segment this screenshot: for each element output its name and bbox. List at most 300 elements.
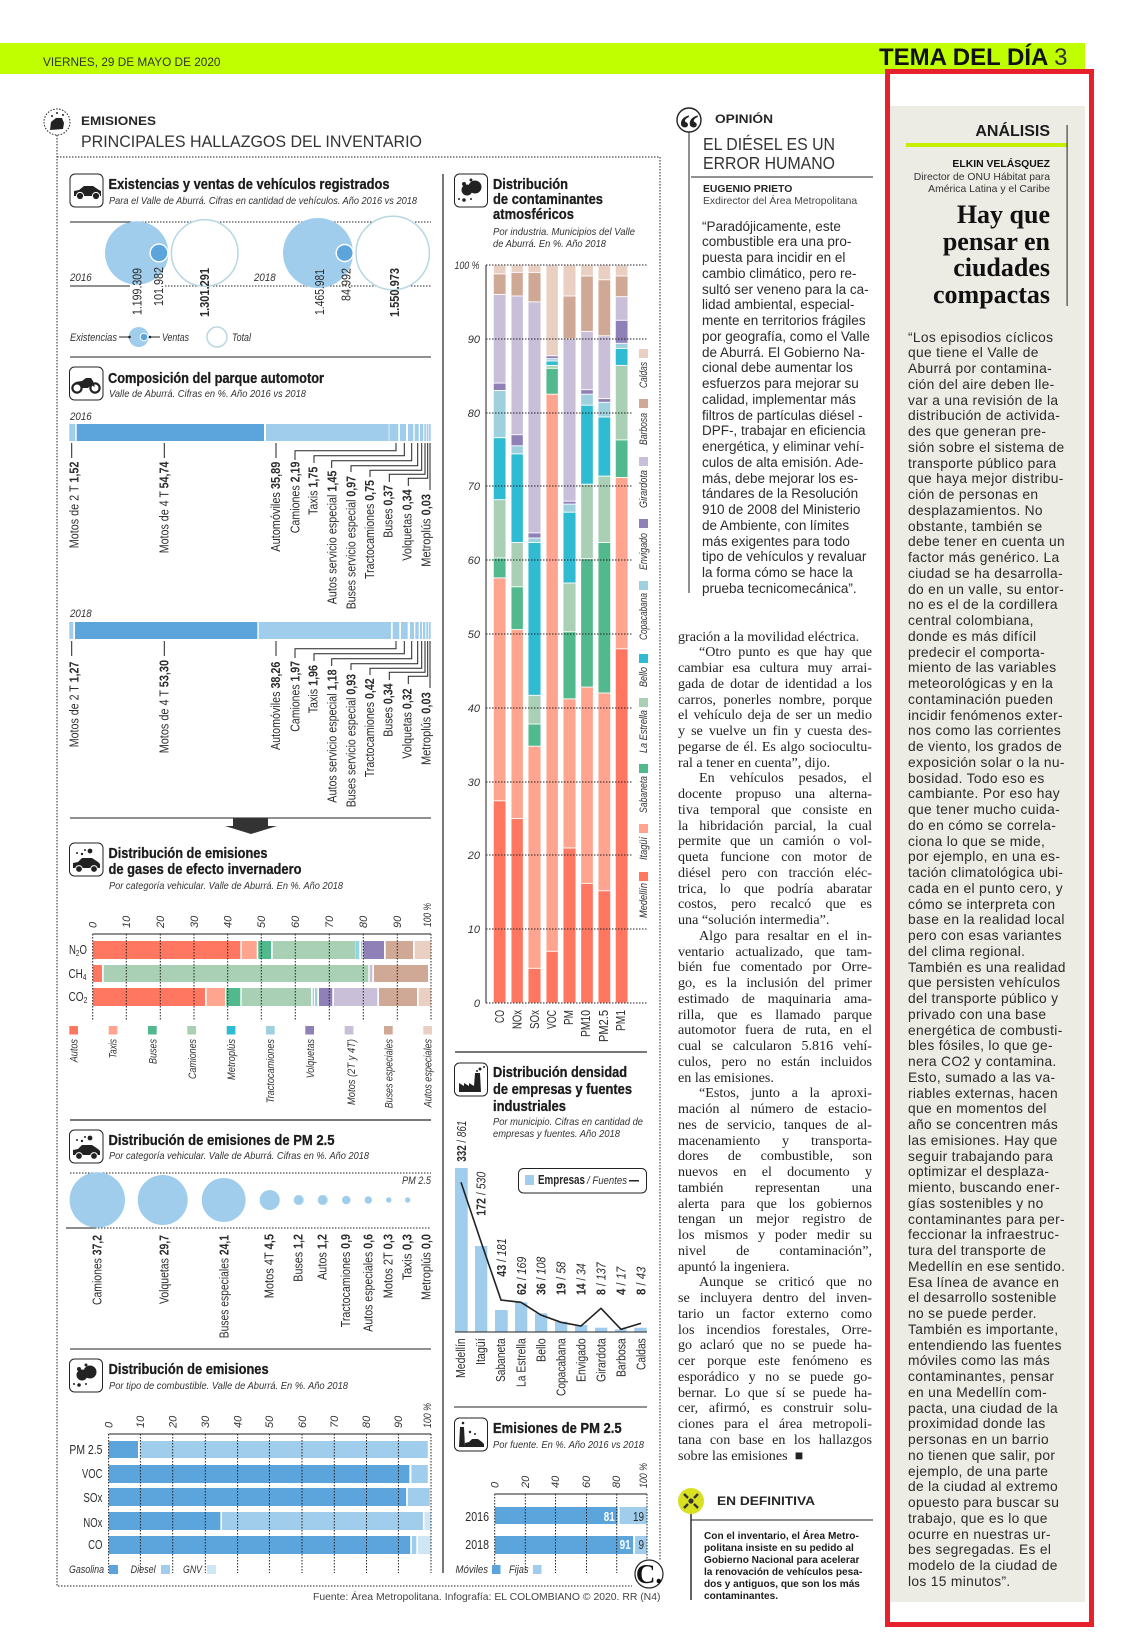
opinion body text: 910 de 2008 del Ministerio bbox=[702, 502, 860, 517]
heading: Por categoría vehicular. Valle de Aburrá. Cifras en %. Año 2018 bbox=[109, 1150, 369, 1162]
article body text: “Estos, junto a la aproxi- bbox=[699, 1085, 872, 1101]
value labels: 62 / 169 bbox=[515, 1257, 529, 1295]
panel: emisiones de PM 2.5 por categoría bbox=[66, 1130, 434, 1338]
row labels: VOC bbox=[82, 1467, 102, 1481]
opinion body text: combustible era una pro- bbox=[702, 234, 851, 249]
leader lines 2018 bbox=[72, 641, 430, 688]
header band bbox=[0, 43, 1085, 74]
value labels: 43 / 181 bbox=[495, 1238, 509, 1277]
labels: Volquetas 29,7 bbox=[157, 1235, 171, 1304]
analysis body text: no es el de la cordillera bbox=[908, 597, 1058, 612]
article body text: tana con base en los hallazgos bbox=[678, 1432, 872, 1448]
date: VIERNES, 29 DE MAYO DE 2020 bbox=[43, 55, 220, 69]
axis: 60 bbox=[297, 1415, 309, 1428]
article body text: gración a la movilidad eléctrica. bbox=[678, 629, 859, 645]
infographic frame bbox=[57, 135, 660, 1586]
row labels bbox=[68, 943, 88, 1005]
value labels: 8 / 43 bbox=[635, 1267, 649, 1295]
analysis body text: opuesto para buscar su bbox=[908, 1495, 1059, 1510]
analysis body text: cómo se interpreta con bbox=[908, 896, 1055, 912]
row labels bbox=[69, 1443, 103, 1552]
labels 2018: Autos servicio especial 1,18 bbox=[326, 669, 340, 803]
article body text: tiva temporal que consiste en bbox=[678, 802, 872, 818]
labels: Autos 1,2 bbox=[316, 1234, 330, 1280]
axis: 20 bbox=[168, 1415, 180, 1429]
article body text: go aclaró que no se puede ha- bbox=[678, 1337, 872, 1353]
legend bbox=[456, 1564, 542, 1576]
analysis body text: ciona lo que se mide, bbox=[908, 834, 1045, 848]
legend box: Empresas bbox=[538, 1173, 585, 1187]
bar labels: PM1 bbox=[614, 1010, 628, 1031]
value labels: 14 / 34 bbox=[575, 1263, 589, 1295]
author: Director de ONU Hábitat para bbox=[914, 172, 1050, 182]
axis: 100 % bbox=[422, 903, 434, 927]
opinion body text: culos de alta emisión. Ade- bbox=[702, 455, 863, 470]
municipality labels: Itagüí bbox=[474, 1338, 488, 1365]
analysis body text: do en cómo se correla- bbox=[908, 818, 1056, 833]
bar labels: SOx bbox=[528, 1009, 542, 1029]
bar: NOx bbox=[511, 265, 523, 1003]
panel background bbox=[890, 106, 1085, 1602]
opinion body text: sultó ser veneno para la ca- bbox=[702, 282, 869, 296]
municipality labels: Copacabana bbox=[555, 1338, 569, 1396]
analysis body text: gías sostenibles y no bbox=[908, 1196, 1044, 1211]
logo: El Colombiano: C. bbox=[636, 1559, 662, 1589]
heading: emisiones bbox=[81, 116, 422, 151]
analysis body text: miento, buscando ener- bbox=[908, 1180, 1060, 1195]
icon: arrows converging bbox=[678, 1488, 704, 1514]
circle chart: 1.465.981 bbox=[313, 269, 327, 315]
opinion body text: “Paradójicamente, este bbox=[702, 218, 841, 234]
circle chart: 84.992 bbox=[340, 268, 354, 301]
legend: Bello bbox=[638, 667, 650, 687]
analysis body text: móviles como las más bbox=[908, 1353, 1050, 1368]
axis: 80 bbox=[611, 1475, 623, 1488]
analysis body text: año se concentren más bbox=[908, 1117, 1058, 1132]
heading: de contaminantes bbox=[493, 191, 603, 208]
circle chart: 2018 bbox=[253, 272, 276, 284]
heading: Distribución de emisiones bbox=[109, 1361, 269, 1378]
labels: Autos especiales 0,6 bbox=[362, 1234, 376, 1332]
row labels: PM 2.5 bbox=[69, 1443, 102, 1457]
axis bbox=[490, 1463, 650, 1573]
panel: gases de efecto invernadero bbox=[68, 843, 435, 1108]
municipality labels: Barbosa bbox=[615, 1338, 629, 1377]
analysis body text: exposición solar o la nu- bbox=[908, 755, 1065, 770]
article body text: go, es la inclusión del primer bbox=[678, 975, 872, 991]
opinion header: Exdirector del Área Metropolitana bbox=[703, 194, 857, 207]
value labels: 81 bbox=[604, 1510, 615, 1524]
bar: PM bbox=[563, 265, 576, 1003]
municipality labels: La Estrella bbox=[515, 1338, 529, 1387]
labels: Metroplús 0,0 bbox=[420, 1234, 434, 1300]
labels 2018 bbox=[67, 660, 434, 807]
legend: Camiones bbox=[187, 1039, 199, 1079]
stacked bar chart bbox=[93, 941, 431, 1006]
analysis body text: Medellín en ese sentido. bbox=[908, 1259, 1065, 1274]
legend: La Estrella bbox=[638, 710, 650, 753]
legend: Barbosa bbox=[638, 413, 650, 445]
analysis body text: trabajo, que es lo que bbox=[908, 1511, 1048, 1526]
axis: 20 bbox=[155, 915, 167, 929]
analysis body text: contaminantes para per- bbox=[908, 1212, 1065, 1226]
article body text: permite que un camión o vol- bbox=[678, 833, 872, 849]
labels 2016: Automóviles 35,89 bbox=[269, 462, 283, 552]
legend: Ventas bbox=[162, 332, 189, 344]
article body text: cer porque este fenómeno es bbox=[678, 1353, 872, 1369]
axis: 100 % bbox=[638, 1463, 650, 1488]
legend: Metroplús bbox=[226, 1039, 238, 1080]
analysis body text: del transporte público y bbox=[908, 991, 1058, 1006]
analysis body text: energética de combusti- bbox=[908, 1022, 1063, 1038]
article body text: bernar. Lo que sí se puede ha- bbox=[678, 1385, 872, 1401]
heading bbox=[108, 845, 343, 892]
value labels: 9 bbox=[638, 1538, 644, 1552]
heading: empresas y fuentes. Año 2018 bbox=[493, 1128, 620, 1140]
heading: Composición del parque automotor bbox=[108, 370, 324, 387]
legend: Existencias bbox=[70, 332, 117, 344]
article body text: En vehículos pesados, el bbox=[699, 770, 872, 786]
article body text: Aunque se criticó que no bbox=[699, 1274, 872, 1290]
opinion body text: tándares de la Resolución bbox=[702, 486, 858, 501]
row labels: SOx bbox=[83, 1491, 103, 1505]
axis: 90 bbox=[392, 915, 404, 928]
article body text: trica, lo que podría abaratar bbox=[678, 881, 872, 897]
circle chart: 1.199.309 bbox=[131, 268, 145, 315]
analysis body text: contaminantes, pensar bbox=[908, 1369, 1054, 1384]
analysis headline: pensar en bbox=[943, 227, 1050, 256]
legend: Envigado bbox=[638, 533, 650, 570]
labels 2016: Camiones 2,19 bbox=[288, 462, 302, 533]
axis and gridlines: 30 bbox=[468, 777, 481, 789]
en definitiva header: EN DEFINITIVA bbox=[717, 1496, 815, 1508]
legend: Buses bbox=[148, 1039, 160, 1064]
heading: Para el Valle de Aburrá. Cifras en cantidad de vehículos. Año 2016 vs 2018 bbox=[109, 195, 417, 207]
row labels: N bbox=[69, 943, 78, 957]
value labels: 2018 bbox=[465, 1538, 489, 1552]
opinion body text: esfuerzos para mejorar su bbox=[702, 376, 859, 391]
analysis body text: el desarrollo sostenible bbox=[908, 1290, 1057, 1305]
labels 2018: Metroplús 0,03 bbox=[420, 692, 434, 765]
article body text: la hibridación parcial, la cual bbox=[678, 818, 872, 834]
value labels: 172 / 530 bbox=[475, 1172, 489, 1216]
axis and gridlines: 40 bbox=[468, 703, 481, 715]
en definitiva body text: Gobierno Nacional para acelerar bbox=[704, 1554, 859, 1566]
axis and gridlines: 20 bbox=[467, 850, 481, 862]
analysis body text: personas en un barrio bbox=[908, 1432, 1049, 1447]
article body text: también representan una bbox=[678, 1180, 872, 1196]
analysis body text: sión sobre el sistema de bbox=[908, 440, 1064, 455]
labels 2018: Motos de 2 T 1,27 bbox=[67, 662, 81, 747]
legend: Girardota bbox=[638, 470, 650, 508]
analysis body text: las emisiones. Hay que bbox=[908, 1133, 1058, 1148]
analysis body text: Aburrá por contamina- bbox=[908, 361, 1052, 376]
analysis body text: feccionar la infraestruc- bbox=[908, 1227, 1059, 1242]
labels 2016: Motos de 4 T 54,74 bbox=[157, 462, 171, 553]
heading bbox=[493, 1420, 644, 1451]
analysis body text: de viento, los grados de bbox=[908, 739, 1062, 754]
article body text: culos, pero no están incluidos bbox=[678, 1054, 872, 1070]
labels: Tractocamiones 0,9 bbox=[339, 1234, 353, 1327]
row labels: NOx bbox=[83, 1516, 103, 1530]
opinion body text: de Ambiente, con límites bbox=[702, 518, 849, 533]
analysis body text: factor más genérico. La bbox=[908, 550, 1060, 565]
article body text: tario un factor externo como bbox=[678, 1306, 872, 1322]
analysis body text: optimizar el desplaza- bbox=[908, 1164, 1049, 1179]
value labels: 332 / 861 bbox=[455, 1121, 469, 1162]
article body text: ventario actualizado, que tam- bbox=[678, 944, 872, 960]
analysis body text: “Los episodios cíclicos bbox=[908, 330, 1053, 344]
legend: Caldas bbox=[638, 362, 650, 388]
heading: de Aburrá. En %. Año 2018 bbox=[493, 238, 606, 250]
row labels: CO bbox=[88, 1538, 103, 1552]
opinion body text: lidad ambiental, especial- bbox=[702, 297, 854, 312]
axis: 50 bbox=[264, 1415, 276, 1428]
analysis body text: var a una revisión de la bbox=[908, 392, 1058, 408]
icon: motorcycle bbox=[70, 367, 103, 400]
labels 2016: Tractocamiones 0,75 bbox=[363, 480, 377, 579]
arrow: down bbox=[225, 818, 277, 834]
opinion body text: más, debe mejorar los es- bbox=[702, 470, 858, 486]
opinion body text: calidad, implementar más bbox=[702, 392, 856, 407]
opinion header: EL DIÉSEL ES UN bbox=[703, 134, 835, 154]
article body text: costos, pero recalcó que es bbox=[678, 896, 872, 912]
bar: CO bbox=[493, 265, 506, 1003]
axis bbox=[88, 903, 434, 1020]
labels: Buses 1,2 bbox=[292, 1234, 306, 1282]
axis and gridlines bbox=[454, 260, 647, 1010]
bar chart bbox=[495, 1507, 647, 1554]
legend: Autos especiales bbox=[423, 1039, 435, 1108]
article body text: sobre las emisiones ■ bbox=[678, 1448, 803, 1464]
bar: VOC bbox=[546, 265, 558, 1003]
icon: car bbox=[70, 174, 103, 207]
analysis body text: También es importante, bbox=[908, 1322, 1058, 1337]
heading bbox=[108, 1132, 369, 1162]
bubble chart bbox=[66, 1172, 432, 1228]
leader lines 2016 bbox=[72, 443, 430, 490]
bar 2018 bbox=[69, 608, 431, 639]
bar labels bbox=[493, 1009, 628, 1042]
municipality labels: Medellín bbox=[454, 1338, 468, 1378]
heading bbox=[109, 1361, 348, 1392]
opinion body text: cambio climático, pero re- bbox=[702, 266, 857, 281]
icon: car with emissions bbox=[70, 843, 103, 876]
panel: distribución de emisiones por combustible bbox=[69, 1359, 434, 1576]
legend: Total bbox=[232, 332, 251, 344]
article body text: ral a tener en cuenta”, dijo. bbox=[678, 755, 830, 771]
analysis body text: ocurre en nuestras ur- bbox=[908, 1526, 1051, 1542]
source credit: Fuente: Área Metropolitana. Infografía: EL COLOMBIANO © 2020. RR (N4) bbox=[313, 1592, 660, 1603]
legend bbox=[69, 1564, 216, 1576]
bar labels: VOC bbox=[545, 1010, 559, 1029]
opinion body text: prueba tecnicomecánica”. bbox=[702, 581, 857, 596]
axis bbox=[104, 1403, 434, 1573]
panel: análisis bbox=[885, 69, 1094, 1627]
labels 2016: Metroplús 0,03 bbox=[420, 494, 434, 567]
analysis body text: los 15 minutos”. bbox=[908, 1574, 1011, 1589]
analysis body text: pacta, una ciudad de la bbox=[908, 1400, 1058, 1416]
article body text: automotor fuera de ruta, en el bbox=[678, 1022, 872, 1038]
analysis body text: bles fósiles, lo que ge- bbox=[908, 1038, 1053, 1053]
article body text: el vehículo deja de ser un medio bbox=[678, 707, 872, 723]
value labels: 19 bbox=[633, 1510, 644, 1524]
article body text: dores de combustible, son bbox=[678, 1148, 872, 1164]
author bbox=[914, 158, 1050, 195]
legend bbox=[70, 327, 251, 347]
legend: Medellín bbox=[638, 883, 650, 918]
article body text: docente propuso una alterna- bbox=[678, 786, 872, 802]
en definitiva body text: politana insiste en su pedido al bbox=[704, 1542, 854, 1554]
opinion header bbox=[677, 106, 873, 593]
legend box bbox=[518, 1168, 646, 1193]
opinion body text: tipo de vehículos y revaluar bbox=[702, 549, 866, 564]
axis and gridlines: 60 bbox=[468, 555, 481, 567]
analysis body text: pero con esas variantes bbox=[908, 928, 1062, 943]
analysis body text: modelo de la ciudad de bbox=[908, 1558, 1058, 1573]
analysis body text: entendiendo las fuentes bbox=[908, 1338, 1062, 1352]
author: América Latina y el Caribe bbox=[928, 184, 1050, 195]
article body text: cer, afirmó, es construir solu- bbox=[678, 1400, 872, 1416]
axis: 0 bbox=[104, 1421, 116, 1428]
article body text: ciones para el área metropoli- bbox=[678, 1416, 872, 1432]
opinion body text: puesta para incidir en el bbox=[702, 250, 845, 265]
bar labels: NOx bbox=[510, 1009, 524, 1029]
labels 2016: Motos de 2 T 1,52 bbox=[67, 462, 81, 548]
municipality labels: Caldas bbox=[635, 1338, 649, 1370]
axis: 60 bbox=[581, 1475, 593, 1488]
analysis body text: miento de las variables bbox=[908, 660, 1056, 675]
axis: 10 bbox=[135, 1415, 147, 1428]
analysis body text: no tienen que salir, por bbox=[908, 1448, 1055, 1463]
analysis headline bbox=[933, 200, 1050, 309]
article body text: alerta para que los gobiernos bbox=[678, 1196, 872, 1212]
analysis body text: por ejemplo, en una es- bbox=[908, 849, 1060, 864]
legend: GNV bbox=[183, 1564, 203, 1576]
axis: 10 bbox=[121, 915, 133, 928]
article body text bbox=[678, 629, 872, 1464]
analysis body text: riables externas, hacen bbox=[908, 1086, 1058, 1100]
labels: Taxis 0,3 bbox=[401, 1234, 415, 1280]
labels 2016: Buses servicio especial 0,97 bbox=[345, 476, 359, 609]
labels 2018: Camiones 1,97 bbox=[288, 661, 302, 732]
analysis body text: contaminación pueden bbox=[908, 692, 1053, 707]
icon: factory bbox=[454, 1063, 488, 1096]
row labels: CO bbox=[68, 990, 87, 1004]
opinion body text: de Aburrá. El Gobierno Na- bbox=[702, 344, 865, 360]
municipality labels: Envigado bbox=[575, 1338, 589, 1382]
analysis body text: Esto, sumado a las va- bbox=[908, 1070, 1055, 1085]
legend: Volquetas bbox=[305, 1039, 317, 1078]
labels 2016: Taxis 1,75 bbox=[307, 467, 321, 515]
heading: Distribución de emisiones de PM 2.5 bbox=[108, 1132, 334, 1149]
heading: Por tipo de combustible. Valle de Aburrá. En %. Año 2018 bbox=[109, 1380, 348, 1392]
circle chart: 1.301.291 bbox=[198, 268, 212, 317]
legend: Copacabana bbox=[638, 593, 650, 640]
legend: Buses especiales bbox=[384, 1039, 396, 1108]
bar labels: PM2.5 bbox=[597, 1010, 611, 1042]
article body text: una “solución intermedia”. bbox=[678, 912, 829, 928]
analysis body text: bosidad. Todo eso es bbox=[908, 770, 1045, 786]
analysis body text: bes segregadas. Es el bbox=[908, 1542, 1051, 1557]
value labels bbox=[455, 1121, 649, 1295]
article body text: queta funcione con motor de bbox=[678, 849, 872, 865]
section title: TEMA DEL DÍA 3 bbox=[879, 44, 1067, 71]
analysis body text: de la ciudad al extremo bbox=[908, 1479, 1058, 1494]
article body text: estimado de maquinaria ama- bbox=[678, 991, 872, 1007]
article body text: carros, ponerles nombre, porque bbox=[678, 692, 872, 708]
opinion body text: filtros de partículas diésel - bbox=[702, 408, 863, 422]
heading: Por fuente. En %. Año 2016 vs 2018 bbox=[493, 1439, 644, 1451]
en definitiva body text: dos y antiguos, que son los más bbox=[704, 1578, 860, 1590]
article body text: nuevos en el documento y bbox=[678, 1164, 872, 1180]
en definitiva body text: contaminantes. bbox=[704, 1590, 778, 1602]
axis: 70 bbox=[324, 915, 336, 928]
analysis body text: transporte público para bbox=[908, 456, 1056, 470]
row labels: O bbox=[80, 943, 87, 957]
legend: Itagüí bbox=[638, 836, 650, 860]
analysis body text: que haya mejor distribu- bbox=[908, 471, 1064, 486]
analysis body text: proximidad donde las bbox=[908, 1416, 1046, 1431]
opinion header: OPINIÓN bbox=[715, 113, 773, 126]
legend bbox=[69, 1026, 435, 1108]
panel: emisiones de PM 2.5 por fuente bbox=[454, 1418, 650, 1576]
analysis body text: en una Medellín com- bbox=[908, 1385, 1047, 1400]
heading: Por industria. Municipios del Valle bbox=[493, 226, 635, 238]
legend: Gasolina bbox=[69, 1564, 104, 1576]
opinion body text: por geografía, como el Valle bbox=[702, 329, 870, 344]
analysis body text: central colombiana, bbox=[908, 613, 1034, 628]
analysis body text: do en un valle, su entor- bbox=[908, 582, 1064, 596]
article body text: se incluyera dentro del inven- bbox=[678, 1290, 872, 1306]
en definitiva body text bbox=[704, 1530, 862, 1602]
analysis body text: meteorológicas y en la bbox=[908, 676, 1053, 691]
legend: Taxis bbox=[108, 1039, 120, 1058]
author: ELKIN VELÁSQUEZ bbox=[952, 159, 1050, 170]
bar 2016: 2016 bbox=[69, 411, 92, 423]
stacked bar chart bbox=[109, 1441, 431, 1554]
analysis body text: ejemplo, de una parte bbox=[908, 1464, 1048, 1478]
heading bbox=[493, 1064, 643, 1140]
analysis rules bbox=[906, 125, 1068, 306]
icon: car with emissions bbox=[70, 1130, 103, 1163]
axis: 20 bbox=[520, 1475, 532, 1489]
axis: 40 bbox=[222, 915, 234, 928]
article body text: apuntó la ingeniera. bbox=[678, 1259, 790, 1275]
article body text: pegarse de él. Es algo sociocultu- bbox=[678, 739, 872, 755]
axis: 30 bbox=[200, 1415, 212, 1428]
axis: 40 bbox=[232, 1415, 244, 1428]
legend: Diesel bbox=[131, 1564, 156, 1576]
axis and gridlines: 50 bbox=[468, 629, 481, 641]
article body text: cambiar esa cultura muy arrai- bbox=[678, 660, 872, 676]
axis: 70 bbox=[329, 1415, 341, 1428]
opinion header: EUGENIO PRIETO bbox=[703, 184, 792, 195]
labels: Buses especiales 24,1 bbox=[217, 1235, 231, 1338]
analysis body text: donde es más difícil bbox=[908, 629, 1036, 644]
analysis body text: que tener mucho cuida- bbox=[908, 802, 1060, 817]
bar labels: CO bbox=[493, 1010, 507, 1023]
article body text: esporádico y no se puede go- bbox=[678, 1369, 872, 1385]
bar labels: PM bbox=[562, 1010, 576, 1025]
value labels: 8 / 137 bbox=[595, 1261, 609, 1295]
analysis body text: También es una realidad bbox=[908, 960, 1066, 974]
municipality labels: Bello bbox=[534, 1338, 548, 1362]
analysis body text: base en la realidad local bbox=[908, 912, 1065, 927]
labels bbox=[91, 1234, 434, 1338]
panel: existencias y ventas bbox=[69, 174, 431, 347]
analysis body text: nos como las corrientes bbox=[908, 723, 1061, 738]
